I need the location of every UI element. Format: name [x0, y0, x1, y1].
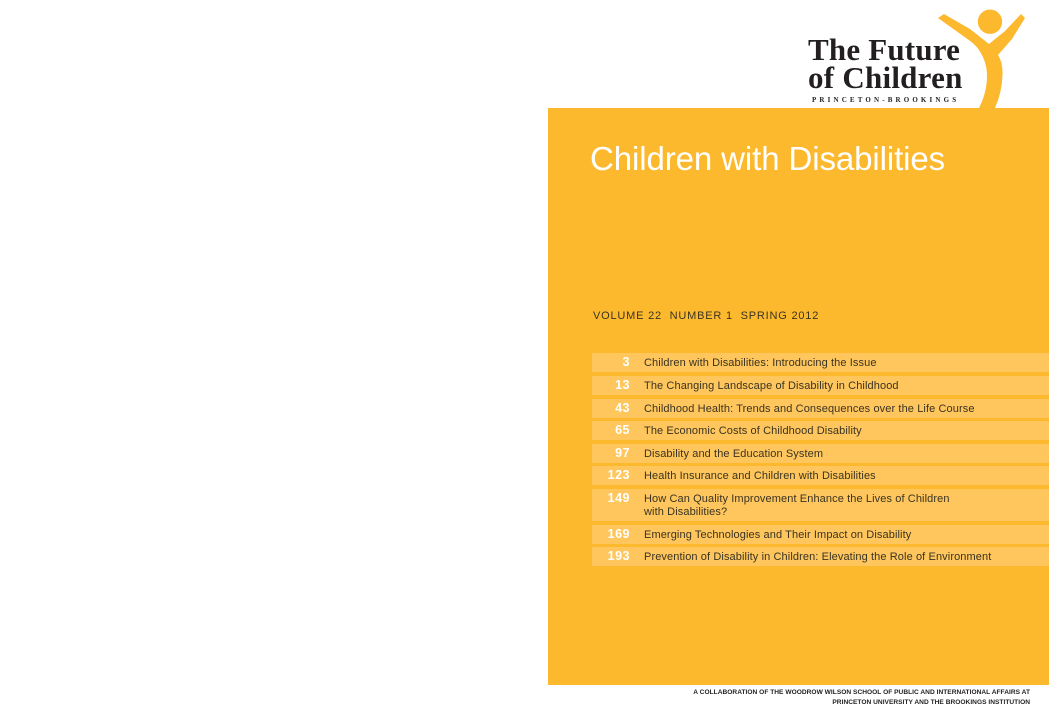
logo: The Future of Children — [808, 10, 1025, 108]
contents row 3 — [592, 399, 1049, 418]
contents row 9 — [592, 547, 1049, 566]
contents row 7: with Disabilities? — [644, 506, 727, 518]
contents row 6: Health Insurance and Children with Disabilities — [644, 470, 876, 482]
contents row 9: 193 — [608, 549, 630, 563]
contents row 4: 65 — [615, 423, 630, 437]
contents row 3: 43 — [615, 401, 630, 415]
logo text line 1: The Future — [808, 32, 960, 67]
contents row 2: 13 — [615, 378, 630, 392]
contents row 1: 3 — [623, 355, 630, 369]
contents row 6: 123 — [608, 468, 630, 482]
contents row 9: Prevention of Disability in Children: Elevating the Role of Environment — [644, 551, 991, 563]
footer credit: PRINCETON UNIVERSITY AND THE BROOKINGS INSTITUTION — [832, 698, 1030, 706]
title: Children with Disabilities — [590, 140, 945, 177]
contents row 8 — [592, 525, 1049, 544]
contents row 3: Childhood Health: Trends and Consequences over the Life Course — [644, 403, 975, 415]
logo text line 2: of Children — [808, 60, 963, 95]
contents row 2: The Changing Landscape of Disability in Childhood — [644, 380, 899, 392]
logo figure icon — [938, 10, 1025, 108]
contents row 4 — [592, 421, 1049, 440]
contents row 7: How Can Quality Improvement Enhance the Lives of Children — [644, 493, 950, 505]
contents row 4: The Economic Costs of Childhood Disability — [644, 425, 862, 437]
footer credit — [693, 689, 1030, 706]
footer credit: A COLLABORATION OF THE WOODROW WILSON SCHOOL OF PUBLIC AND INTERNATIONAL AFFAIRS AT — [693, 689, 1030, 696]
contents row 5: Disability and the Education System — [644, 448, 823, 460]
contents row 5 — [592, 444, 1049, 463]
contents row 7 — [592, 489, 1049, 521]
contents row 6 — [592, 466, 1049, 485]
contents row 2 — [592, 376, 1049, 395]
contents row 7: 149 — [608, 491, 630, 505]
contents row 8: Emerging Technologies and Their Impact on Disability — [644, 529, 911, 541]
contents row 8: 169 — [608, 527, 630, 541]
contents row 1: Children with Disabilities: Introducing the Issue — [644, 357, 877, 369]
logo subtitle: PRINCETON-BROOKINGS — [812, 96, 959, 104]
volume line: VOLUME 22 NUMBER 1 SPRING 2012 — [593, 310, 819, 322]
contents row 5: 97 — [615, 446, 630, 460]
contents row 1 — [592, 353, 1049, 372]
panel: orange cover — [548, 108, 1049, 685]
